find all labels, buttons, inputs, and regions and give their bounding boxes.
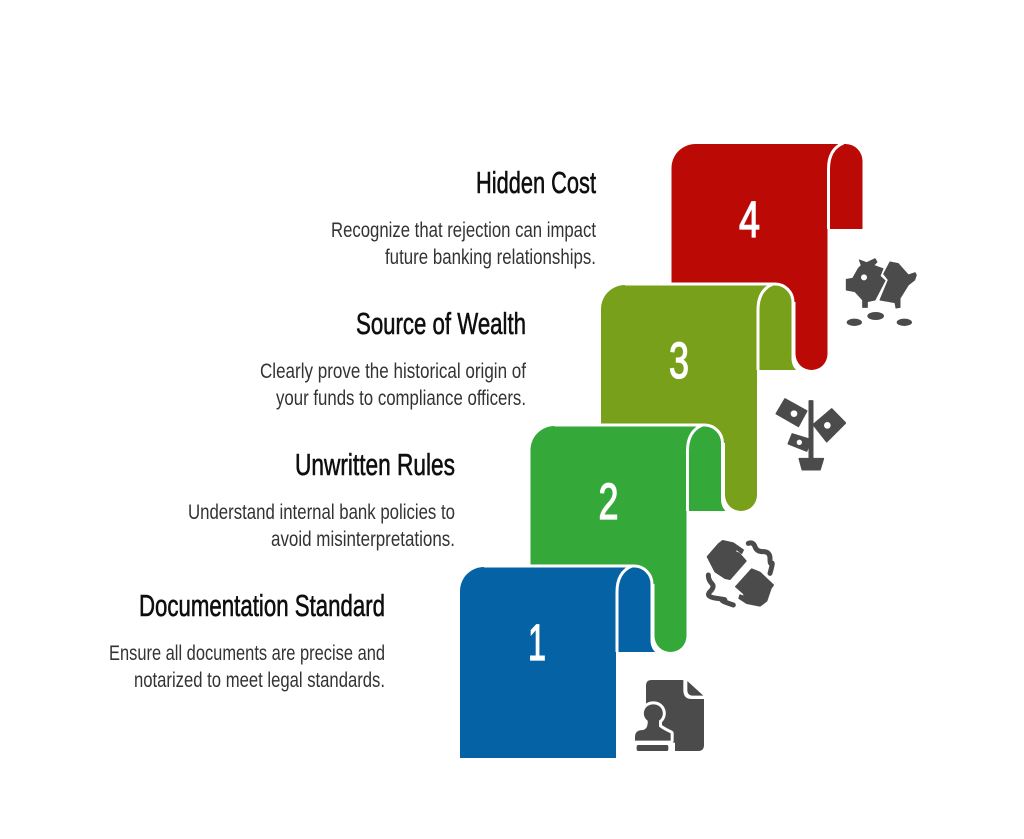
description: Understand internal bank policies to (188, 501, 455, 524)
description (260, 360, 526, 410)
text block: Source of Wealth (260, 306, 526, 410)
description: Recognize that rejection can impact (331, 219, 596, 242)
description: future banking relationships. (385, 246, 596, 269)
description: Ensure all documents are precise and (109, 642, 385, 665)
description (188, 501, 455, 551)
step 2 ribbon: green (530, 425, 730, 652)
description: your funds to compliance officers. (276, 387, 526, 410)
icon: money plant (776, 399, 845, 470)
step 4 ribbon: red (672, 143, 862, 370)
text block: Unwritten Rules (188, 447, 455, 551)
description: avoid misinterpretations. (271, 528, 455, 551)
number 1: 1 (528, 614, 546, 671)
step 3 ribbon: olive (601, 284, 800, 511)
text block: Documentation Standard (109, 588, 385, 692)
description (109, 642, 385, 692)
number 2: 2 (598, 473, 618, 530)
description (331, 219, 596, 269)
icon: breaking handshake (707, 541, 773, 606)
heading: Source of Wealth (356, 306, 526, 341)
step 1 ribbon: blue (460, 566, 659, 758)
heading: Hidden Cost (476, 165, 596, 200)
description: Clearly prove the historical origin of (260, 360, 526, 383)
icon: document with stamp (630, 680, 704, 752)
number 3: 3 (669, 332, 689, 389)
heading: Unwritten Rules (295, 447, 455, 482)
text block: Hidden Cost (331, 165, 596, 269)
heading: Documentation Standard (139, 588, 385, 623)
description: notarized to meet legal standards. (134, 669, 385, 692)
icon: broken piggy bank (846, 259, 916, 326)
number 4: 4 (739, 191, 760, 248)
